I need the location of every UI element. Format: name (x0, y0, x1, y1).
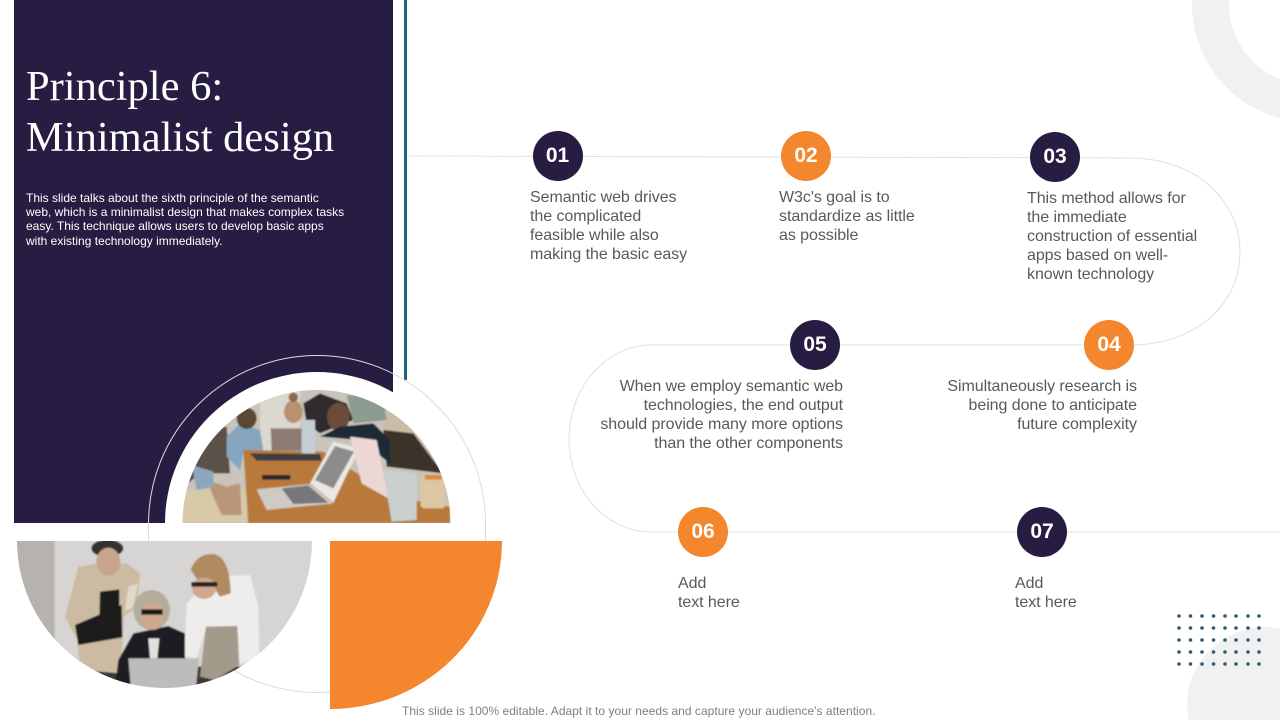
step 04 text: Simultaneously research is (947, 378, 1137, 395)
teal vertical accent bar (404, 0, 407, 380)
step 05 text (600, 378, 843, 452)
description text: easy. This technique allows users to develop basic apps (26, 219, 324, 233)
timeline connector path (407, 156, 1280, 532)
step 02 text: as possible (779, 227, 858, 244)
title: Minimalist design (26, 114, 334, 161)
step 05 text: technologies, the end output (644, 397, 843, 414)
footer note: This slide is 100% editable. Adapt it to your needs and capture your audience's attention. (402, 704, 876, 718)
step 01 badge (532, 131, 582, 181)
description text: web, which is a minimalist design that makes complex tasks (26, 205, 344, 219)
step 07 text: text here (1015, 594, 1077, 611)
step 04 badge: 04 (1097, 333, 1121, 356)
step 01 text: making the basic easy (530, 246, 687, 263)
step 02 text: W3c's goal is to (779, 189, 890, 206)
decorative ring top right (1192, 0, 1280, 118)
step 06 text (678, 575, 740, 611)
step 01 text: Semantic web drives (530, 189, 676, 206)
step 04 text: future complexity (1017, 416, 1137, 433)
step 07 text: Add (1015, 575, 1043, 592)
photo: three women at a laptop (13, 540, 313, 690)
step 05 text: When we employ semantic web (620, 378, 843, 395)
step 04 badge (1084, 320, 1134, 370)
step 03 text: construction of essential (1027, 228, 1197, 245)
decorative circle bottom right (1187, 627, 1280, 720)
step 01 text: feasible while also (530, 227, 659, 244)
step 02 text (779, 189, 915, 244)
step 01 text (530, 189, 687, 263)
step 01 badge: 01 (546, 144, 569, 167)
description text: This slide talks about the sixth principle of the semantic (26, 191, 319, 205)
white backing half disc (165, 372, 469, 523)
step 02 badge (781, 131, 831, 181)
description text (26, 191, 344, 248)
step 03 text (1027, 190, 1197, 283)
step 03 text: apps based on well- (1027, 247, 1168, 264)
step 06 text: Add (678, 575, 706, 592)
thin circle outline (148, 356, 486, 692)
panel: title background (14, 0, 393, 523)
step 05 badge (790, 320, 840, 370)
step 01 text: the complicated (530, 208, 641, 225)
step 07 badge: 07 (1030, 520, 1054, 542)
step 04 text (947, 378, 1137, 433)
step 07 badge (1017, 506, 1067, 556)
dot grid (1177, 614, 1261, 666)
description text: with existing technology immediately. (26, 234, 223, 248)
step 05 text: than the other components (654, 435, 843, 452)
step 03 text: the immediate (1027, 209, 1127, 226)
step 03 badge: 03 (1043, 145, 1067, 168)
step 06 badge: 06 (691, 520, 715, 542)
title (26, 63, 334, 161)
step 06 badge (678, 506, 728, 556)
step 07 text (1015, 575, 1077, 611)
step 04 text: being done to anticipate (969, 397, 1137, 414)
step 03 text: This method allows for (1027, 190, 1186, 207)
step 03 badge (1030, 132, 1080, 182)
orange quarter disc (330, 541, 502, 709)
step 05 badge: 05 (803, 333, 827, 356)
step 05 text: should provide many more options (600, 416, 843, 433)
photo: team around a table with laptops (180, 387, 453, 527)
step 06 text: text here (678, 594, 740, 611)
title: Principle 6: (26, 63, 223, 110)
step 03 text: known technology (1027, 266, 1154, 283)
step 02 badge: 02 (794, 144, 818, 167)
step 02 text: standardize as little (779, 208, 915, 225)
